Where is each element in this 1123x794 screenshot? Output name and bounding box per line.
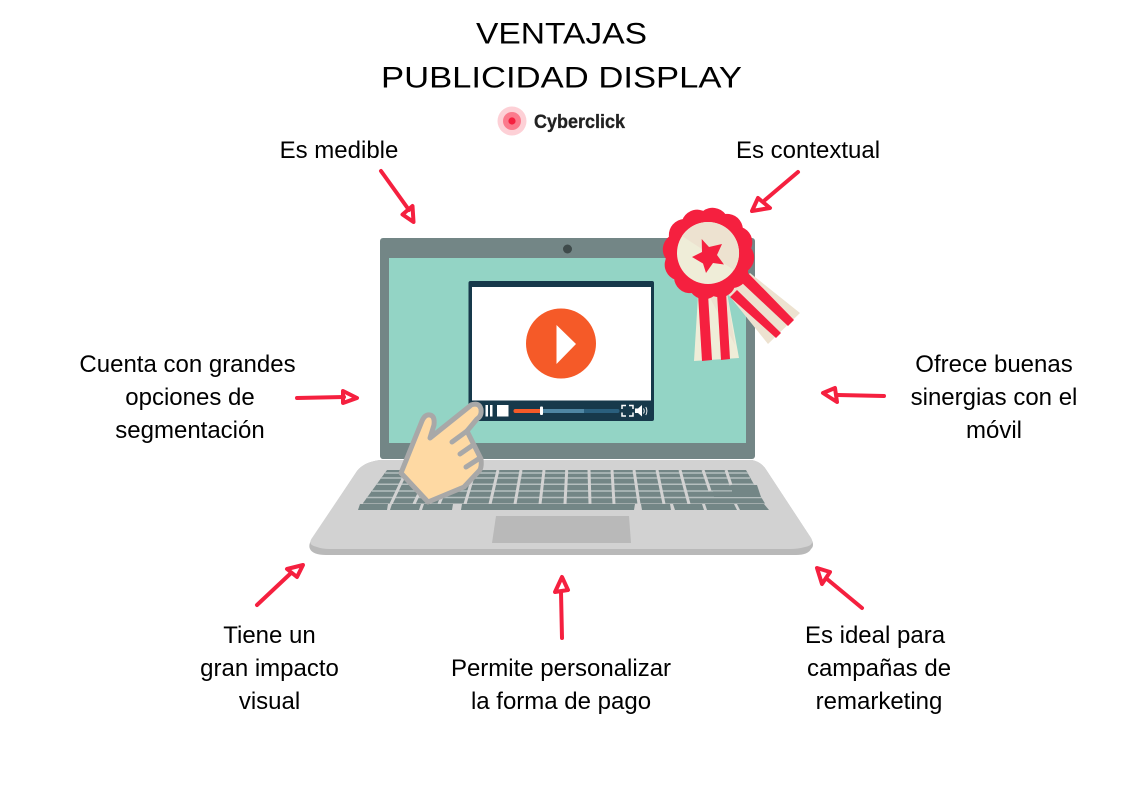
label: Es medible: Es medible (280, 137, 398, 164)
icon: award rosette (657, 202, 800, 361)
play button (526, 308, 596, 378)
video player (468, 281, 654, 421)
arrow: segmentación (297, 391, 357, 403)
label: móvil (911, 351, 1077, 444)
keyboard (354, 470, 772, 512)
enter and shift keys (693, 485, 765, 504)
label: móvil: sinergias con el (911, 384, 1077, 411)
label: impacto visual: visual (239, 688, 300, 715)
label: impacto visual: gran impacto (200, 655, 339, 682)
label: forma de pago (451, 655, 671, 715)
label: segmentación (79, 351, 296, 444)
badge centre (677, 222, 739, 284)
label: impacto visual: Tiene un (223, 622, 316, 649)
label: remarketing: remarketing (816, 688, 942, 715)
badge star (692, 239, 724, 273)
laptop lid (380, 238, 755, 459)
arrow: remarketing (817, 568, 862, 608)
title: VENTAJAS (476, 18, 647, 50)
scalloped badge (657, 202, 760, 305)
label: segmentación: Cuenta con grandes (79, 351, 296, 378)
arrow: forma de pago (555, 577, 568, 638)
laptop (309, 238, 813, 555)
title (381, 18, 742, 94)
label: impacto visual (200, 622, 339, 715)
label: segmentación: opciones de (125, 384, 255, 411)
label: segmentación: segmentación (115, 417, 265, 444)
label: remarketing: Es ideal para (805, 622, 946, 649)
arrow: móvil (823, 388, 884, 402)
right ribbon (727, 273, 800, 344)
label: forma de pago: la forma de pago (471, 688, 651, 715)
label: Es contextual: Es contextual (736, 137, 880, 164)
label: remarketing (805, 622, 951, 715)
arrow: Es contextual (752, 172, 798, 211)
logo: Cyberclick: Cyberclick (534, 112, 625, 133)
laptop base (309, 460, 813, 555)
arrow: Es medible (381, 171, 414, 222)
icon: pointing hand (401, 404, 481, 502)
label: forma de pago: Permite personalizar (451, 655, 671, 682)
arrow: impacto visual (257, 565, 303, 605)
trackpad (492, 516, 631, 543)
left ribbon (694, 292, 739, 361)
laptop screen (389, 258, 746, 443)
title: PUBLICIDAD DISPLAY (381, 62, 742, 94)
label: remarketing: campañas de (807, 655, 951, 682)
webcam (563, 244, 572, 254)
label: móvil: Ofrece buenas (915, 351, 1073, 378)
label: móvil: móvil (966, 417, 1022, 444)
logo: Cyberclick (498, 106, 625, 136)
player controls (486, 405, 647, 416)
